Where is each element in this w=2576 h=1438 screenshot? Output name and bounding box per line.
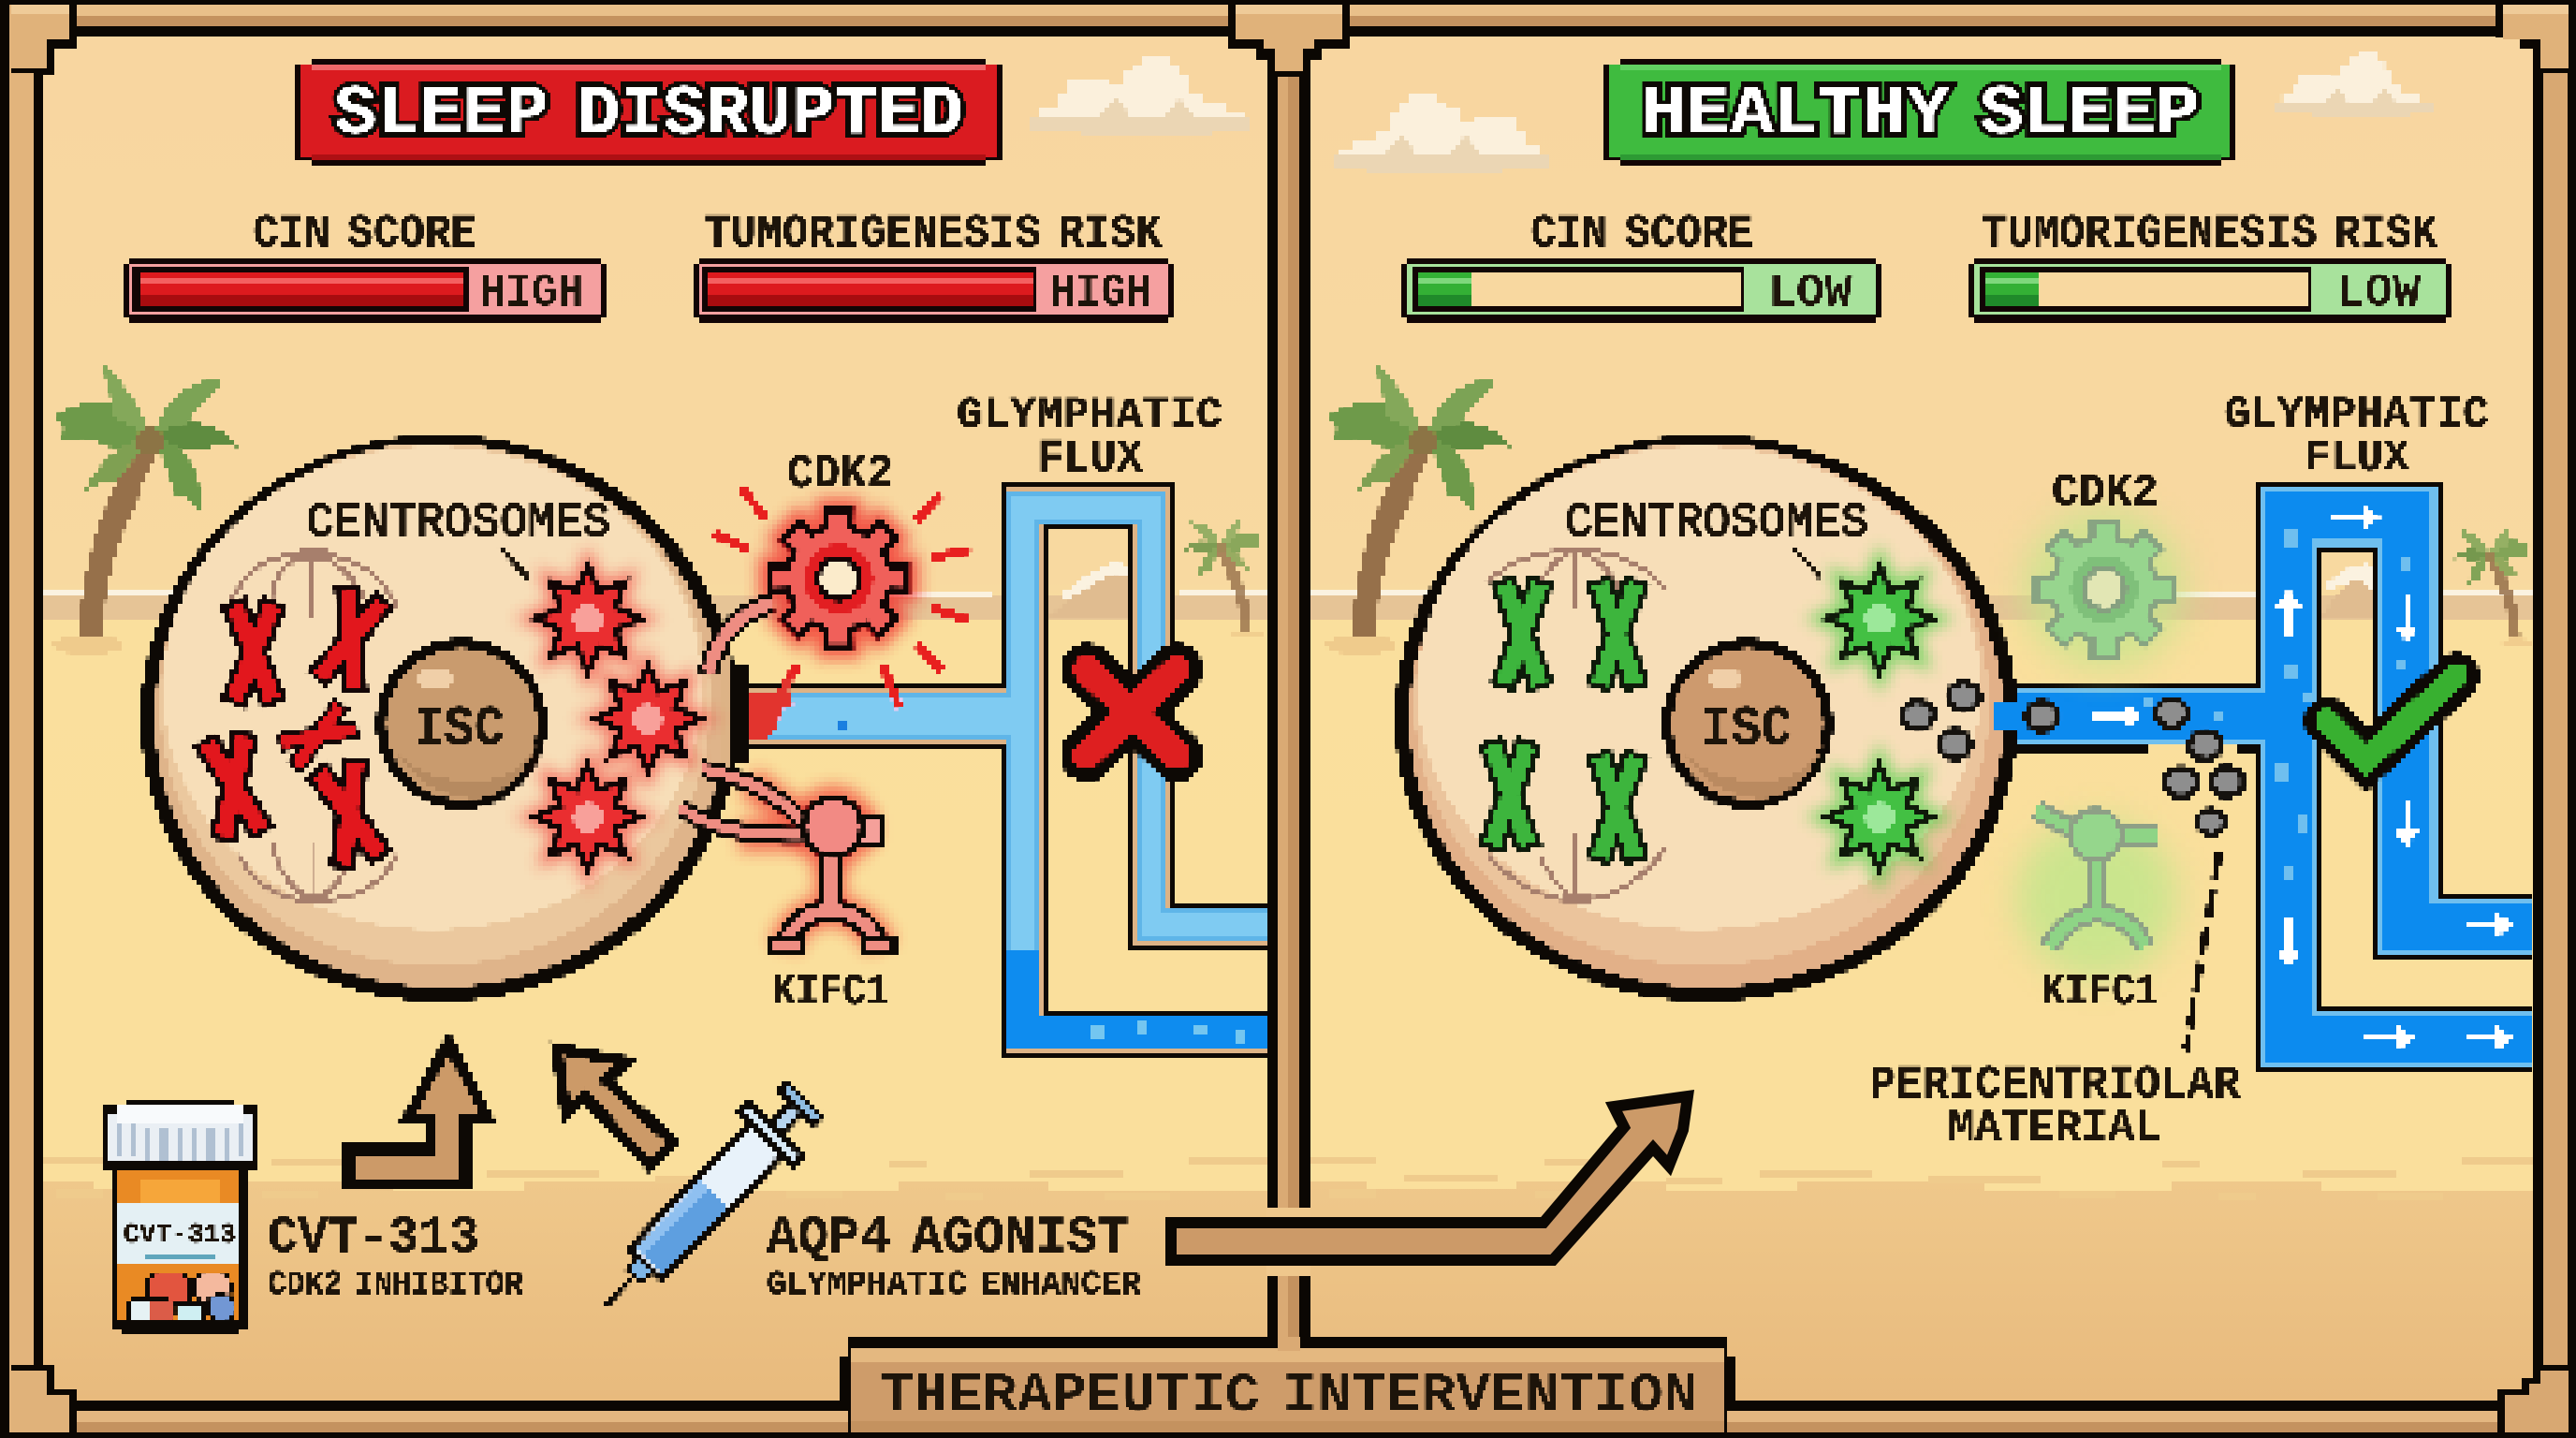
corner bracket top-left — [11, 5, 77, 75]
corner bracket top-right — [2496, 5, 2569, 73]
desert background right — [1310, 37, 2533, 1401]
label: pericentriolar material — [1869, 1059, 2240, 1154]
label: kifc1: KIFC1 — [772, 968, 889, 1018]
metric: tumorigenesis risk low: LOW — [2337, 267, 2421, 320]
label: cvt-313: CDK2 INHIBITOR — [268, 1266, 523, 1304]
arrow diagonal from aqp4 agonist — [557, 1049, 673, 1166]
cdk2 gear active — [708, 489, 971, 708]
corner bracket bottom-left — [11, 1365, 77, 1432]
sleep disrupted title badge — [296, 58, 1002, 166]
metric: cin score low: CIN SCORE — [1530, 208, 1753, 261]
healthy sleep title badge — [1604, 58, 2236, 166]
glymphatic pipe flowing — [1989, 517, 2533, 1039]
label: isc: ISC — [414, 698, 505, 762]
metric: tumorigenesis risk low: TUMORIGENESIS RISK — [1982, 208, 2437, 261]
metric: tumorigenesis risk high: HIGH — [1050, 267, 1151, 320]
cell left — [148, 442, 751, 994]
arrow up from cvt-313 — [349, 1043, 489, 1185]
glymphatic pipe blocked — [751, 507, 1267, 1045]
hud and labels right — [1401, 58, 2489, 1154]
label: glymphatic flux: GLYMPHATIC — [2224, 390, 2489, 441]
label: centrosomes: CENTROSOMES — [1565, 497, 1868, 550]
label: glymphatic flux: FLUX — [1037, 433, 1143, 486]
label: glymphatic flux: FLUX — [2305, 433, 2409, 484]
clouds right — [1333, 53, 2435, 171]
flow arrows — [2093, 506, 2514, 1050]
label: glymphatic flux: GLYMPHATIC — [957, 391, 1222, 441]
cell right — [1402, 442, 2026, 994]
pericentriolar debris cleared — [2027, 699, 2243, 834]
metric: cin score high — [124, 208, 606, 322]
label: pericentriolar material: PERICENTRIOLAR — [1869, 1059, 2240, 1112]
metric: tumorigenesis risk high — [693, 208, 1174, 322]
distant hill and small palm left — [1048, 516, 1262, 638]
label: kifc1: KIFC1 — [2042, 968, 2159, 1018]
panel: sleep disrupted — [43, 37, 1267, 1401]
kifc1 motor faded — [2017, 810, 2176, 978]
metric: tumorigenesis risk high: TUMORIGENESIS RISK — [705, 208, 1162, 261]
palm tree large left — [52, 364, 242, 654]
metric: cin score low — [1401, 208, 1882, 322]
metric: tumorigenesis risk low — [1969, 208, 2452, 322]
chromosomes left — [212, 599, 377, 856]
label: glymphatic flux — [2224, 390, 2489, 484]
artwork left, pixelated — [52, 58, 1267, 1336]
debris inside cell — [1902, 682, 1980, 758]
cdk2 gear faded — [2024, 508, 2185, 669]
desert background left — [43, 37, 1267, 1401]
label: cdk2: CDK2 — [787, 448, 893, 502]
metric: cin score high: CIN SCORE — [253, 208, 476, 261]
metric: cin score high: HIGH — [480, 267, 583, 320]
kifc1 motor active — [681, 769, 894, 952]
centrosomes right — [1827, 566, 1932, 870]
mitotic spindle right — [1486, 550, 1667, 903]
green check — [2327, 676, 2456, 760]
label: aqp4 agonist: GLYMPHATIC ENHANCER — [767, 1266, 1141, 1304]
label: aqp4 agonist: AQP4 AGONIST — [767, 1208, 1129, 1268]
toxic splatter in connector — [751, 674, 794, 740]
heading: SLEEP DISRUPTED — [334, 75, 963, 154]
label: centrosomes: CENTROSOMES — [306, 497, 610, 550]
label: isc: ISC — [1701, 698, 1792, 762]
label: cdk2: CDK2 — [2052, 468, 2159, 519]
pill bottle — [105, 1099, 255, 1336]
gap behind transfer arrow — [1266, 1208, 1310, 1276]
heading: HEALTHY SLEEP — [1642, 75, 2200, 154]
syringe — [578, 1074, 831, 1331]
hud and labels left — [124, 58, 1222, 1304]
metric: cin score low: LOW — [1768, 267, 1852, 320]
centrosomes left — [535, 566, 700, 870]
red x blocked — [1087, 669, 1177, 756]
corner bracket top-center — [1228, 5, 1350, 77]
palm tree large right — [1325, 364, 1515, 654]
distant hill and small palm right — [2320, 524, 2531, 646]
corner bracket bottom-right — [2497, 1365, 2569, 1432]
arrow: intervention to healthy sleep — [1171, 1096, 1688, 1260]
clouds left — [1030, 58, 1248, 134]
artwork right, pixelated — [1325, 53, 2533, 1050]
tab text: THERAPEUTIC INTERVENTION — [879, 1365, 1698, 1428]
label: cvt-313: CVT-313 — [268, 1208, 479, 1268]
nucleus left — [381, 643, 542, 804]
label: bottle text: CVT-313 — [124, 1219, 236, 1252]
mitotic spindle left — [232, 550, 397, 902]
center divider — [1267, 26, 1310, 1346]
tab: therapeutic intervention — [840, 1337, 1734, 1432]
label: glymphatic flux — [957, 391, 1222, 486]
label: cvt-313 — [268, 1208, 523, 1304]
panel: healthy sleep — [1310, 37, 2533, 1401]
chromosomes right — [1495, 592, 1632, 849]
label: aqp4 agonist — [767, 1208, 1141, 1304]
nucleus right — [1667, 643, 1828, 804]
label: pericentriolar material: MATERIAL — [1948, 1104, 2161, 1154]
